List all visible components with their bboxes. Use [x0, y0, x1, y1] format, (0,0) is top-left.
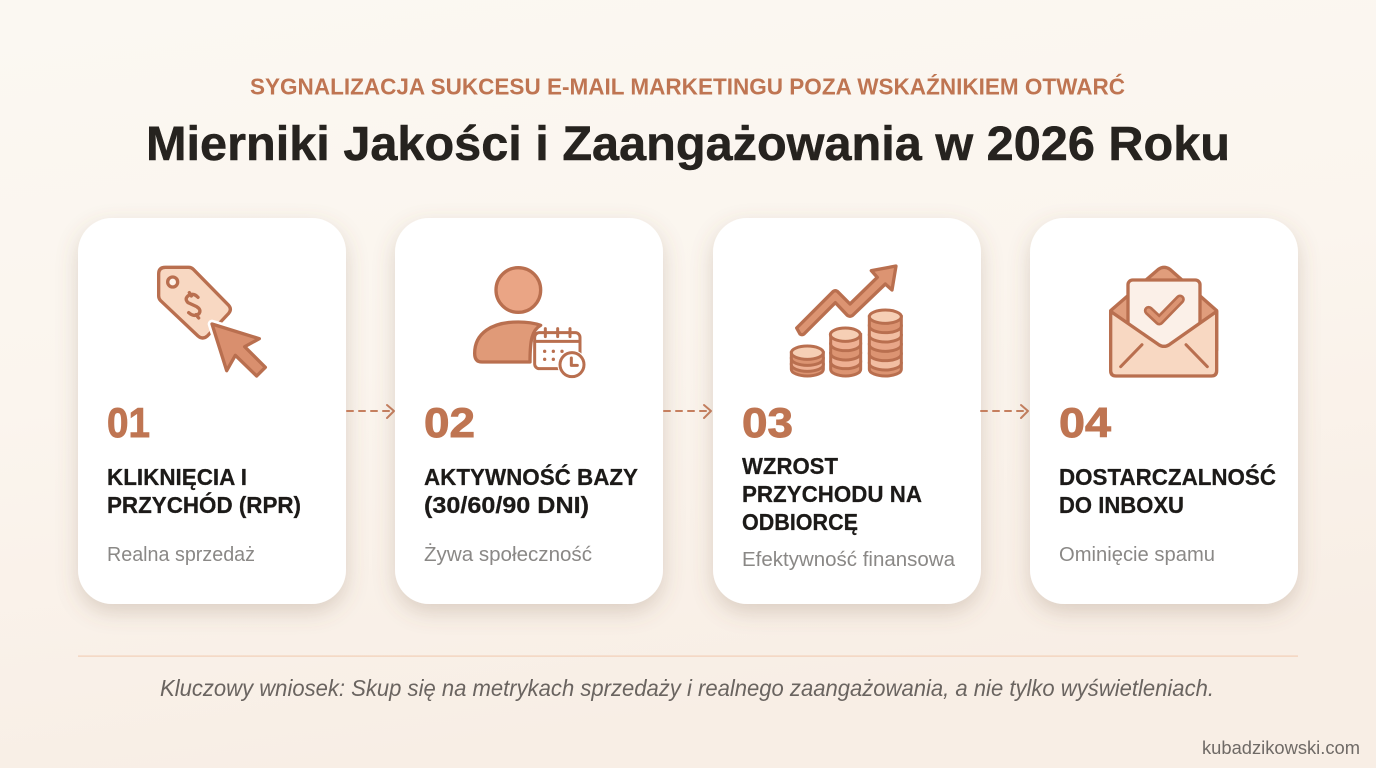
heading: WZROST — [742, 453, 839, 479]
description: Żywa społeczność — [424, 543, 592, 566]
heading — [1059, 463, 1276, 518]
key takeaway: Kluczowy wniosek: Skup się na metrykach sprzedaży i realnego zaangażowania, a nie tylko wyświetleniach. — [160, 675, 1214, 701]
icon: price tag with cursor — [159, 267, 265, 376]
description: Ominięcie spamu — [1059, 543, 1215, 566]
icon: person with calendar and clock — [475, 268, 587, 379]
icon: growth arrow with coin stacks — [791, 266, 901, 376]
heading — [107, 464, 301, 518]
heading: (30/60/90 DNI) — [424, 492, 589, 518]
heading: PRZYCHODU NA — [742, 481, 922, 507]
heading: ODBIORCĘ — [742, 509, 858, 535]
heading: DO INBOXU — [1059, 492, 1184, 518]
number 03: 03 — [742, 399, 793, 446]
icon: open envelope with check — [1111, 267, 1217, 376]
heading: PRZYCHÓD (RPR) — [107, 491, 301, 518]
panel: card 2 base activity — [395, 218, 663, 604]
number 04: 04 — [1059, 399, 1112, 446]
arrow 1 to 2 — [347, 405, 394, 418]
description: Realna sprzedaż — [107, 543, 255, 566]
heading: AKTYWNOŚĆ BAZY — [424, 463, 638, 490]
panel: card 4 inbox deliverability — [1030, 218, 1298, 604]
footer credit: kubadzikowski.com — [1202, 738, 1360, 758]
number 02: 02 — [424, 399, 475, 446]
heading — [742, 453, 922, 535]
title: Mierniki Jakości i Zaangażowania w 2026 Roku — [146, 118, 1230, 171]
heading — [424, 463, 638, 518]
heading: KLIKNIĘCIA I — [107, 464, 247, 490]
arrow 3 to 4 — [981, 405, 1028, 418]
panel: card 3 revenue growth — [713, 218, 981, 604]
arrow 2 to 3 — [664, 405, 711, 418]
panel: card 1 clicks and revenue — [78, 218, 346, 604]
description: Efektywność finansowa — [742, 548, 956, 571]
heading: DOSTARCZALNOŚĆ — [1059, 463, 1276, 490]
subtitle: SYGNALIZACJA SUKCESU E-MAIL MARKETINGU POZA WSKAŹNIKIEM OTWARĆ — [250, 72, 1125, 100]
number 01: 01 — [107, 399, 150, 446]
